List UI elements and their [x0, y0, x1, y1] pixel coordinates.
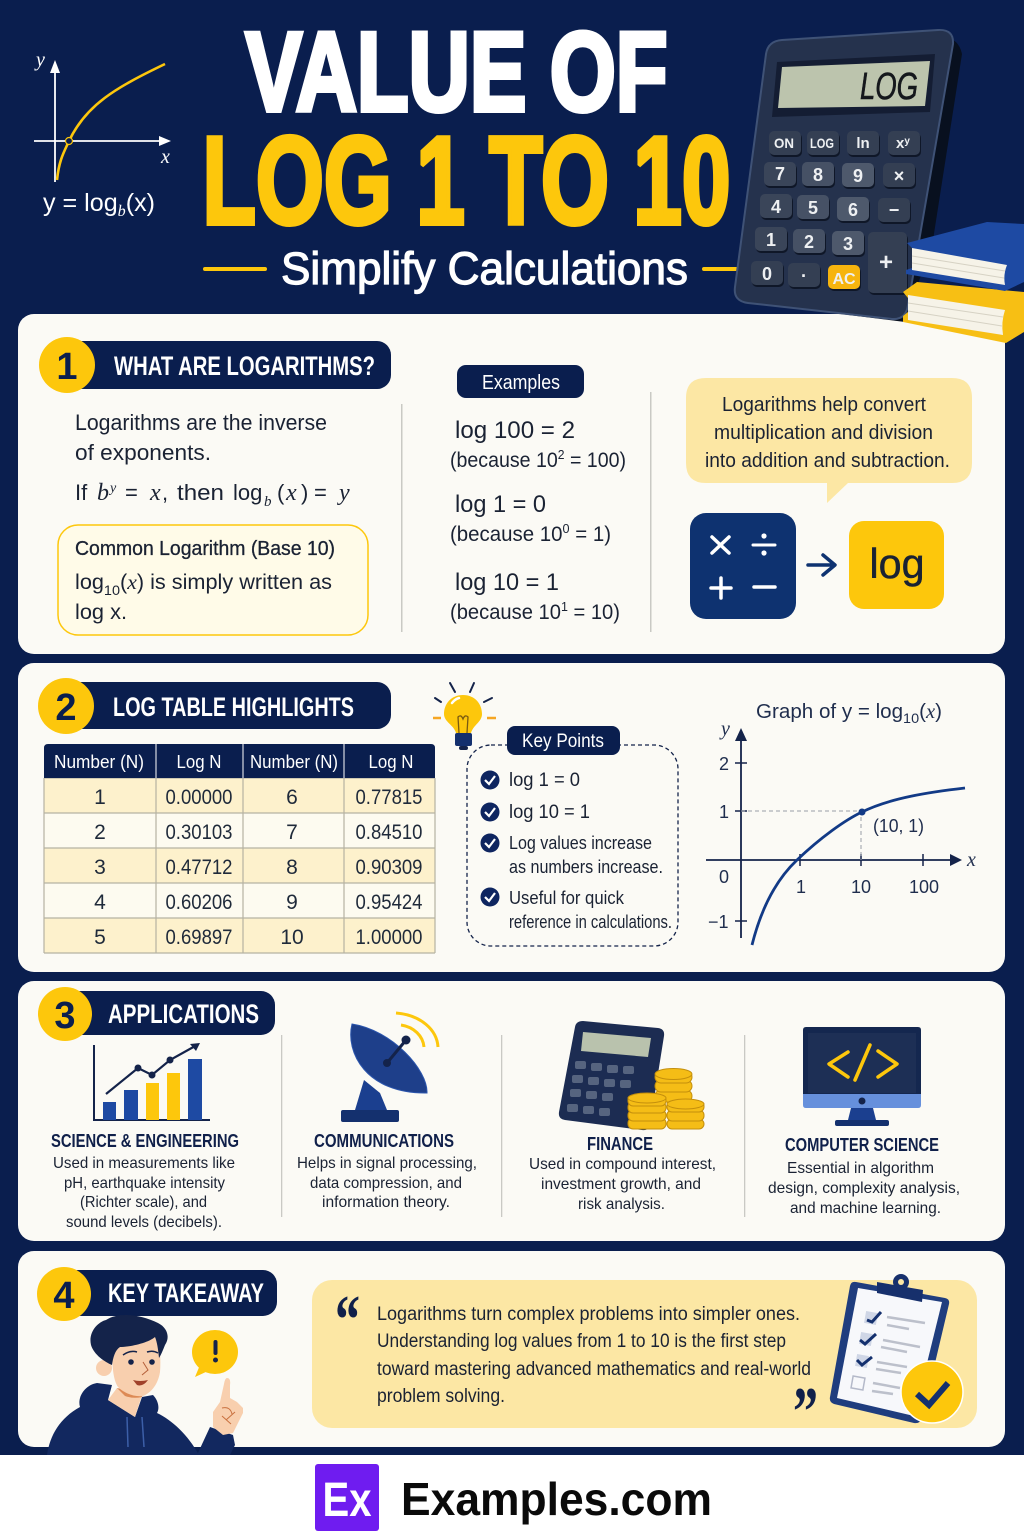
log table: 0.90309	[356, 856, 422, 879]
section 2 heading: 2	[55, 687, 77, 729]
icon: logarithm curve graph: b	[118, 203, 126, 220]
icon: bar chart	[94, 1043, 210, 1120]
calculator keys: LOG	[810, 135, 834, 151]
wordmark: Examples.com	[401, 1473, 712, 1525]
section 1 heading: WHAT ARE LOGARITHMS?	[114, 351, 375, 381]
calculator keys: 7	[775, 164, 785, 184]
section 4 heading: KEY TAKEAWAY	[108, 1278, 264, 1308]
log table: 7	[286, 821, 298, 844]
chart: graph of y = log10(x): 1	[719, 802, 729, 822]
calculator keys: 9	[853, 166, 863, 186]
icon: arithmetic operators	[690, 513, 796, 619]
calculator keys: +	[879, 249, 893, 276]
examples list: = 1)	[570, 523, 611, 546]
icon: logarithm curve graph: y	[34, 49, 45, 71]
calculator keys: 5	[808, 198, 818, 218]
chart: graph of y = log10(x)	[706, 701, 976, 945]
calculator keys: −	[889, 200, 899, 220]
calculator keys: y	[904, 136, 910, 147]
log table: 0.84510	[356, 821, 422, 844]
face	[112, 1335, 160, 1396]
text: definition: y	[108, 481, 117, 496]
log table: 9	[286, 891, 298, 914]
speech bubble: conversion note: into addition and subtraction.	[705, 450, 950, 472]
panel: key points	[467, 726, 678, 946]
application: communications: COMMUNICATIONS	[314, 1131, 454, 1151]
application: science and engineering: pH, earthquake intensity	[64, 1175, 225, 1192]
chart title: (	[919, 701, 926, 723]
log table: 0.95424	[356, 891, 423, 914]
calculator keys: ON	[774, 135, 794, 151]
eyes and mouth	[123, 1351, 158, 1385]
chart: graph of y = log10(x): y	[719, 718, 730, 740]
calculator keys: 3	[843, 234, 853, 254]
icon: computer monitor with code	[803, 1027, 921, 1126]
examples list: log 1 = 0	[455, 491, 546, 518]
coins	[628, 1068, 704, 1129]
yellow book	[903, 282, 1024, 343]
examples list: (because 10	[450, 601, 566, 624]
application: computer science: and machine learning.	[790, 1200, 941, 1217]
ear	[96, 1360, 112, 1376]
section 4 heading: 4	[53, 1275, 75, 1317]
examples list: log 10 = 1	[455, 569, 559, 596]
section 1 heading: 1	[56, 346, 78, 388]
text: definition: Logarithms are the inverse	[75, 410, 327, 435]
section 3 heading: APPLICATIONS	[108, 999, 259, 1029]
icon: stacked books	[903, 222, 1024, 343]
icon: calculator with coins	[559, 1021, 704, 1130]
takeaway text: Understanding log values from 1 to 10 is the first step	[377, 1331, 786, 1352]
table header: Number (N)	[54, 752, 144, 772]
application: computer science	[768, 1135, 960, 1217]
calculator keys: x	[896, 135, 904, 152]
application: communications: information theory.	[322, 1194, 450, 1211]
title: value of: VALUE OF	[246, 10, 668, 134]
examples list: (because 10	[450, 523, 566, 546]
text: definition: b	[264, 494, 272, 510]
icon: logarithm curve graph: (x)	[126, 189, 155, 217]
log badge	[849, 521, 944, 609]
finger creases	[222, 1408, 235, 1424]
text: definition: x	[149, 480, 161, 506]
chart: graph of y = log10(x): 2	[719, 754, 729, 774]
takeaway text: Logarithms turn complex problems into simpler ones.	[377, 1304, 800, 1325]
key point text: Log values increase	[509, 833, 652, 853]
calculator display: LOG	[860, 66, 918, 108]
log table: 0.00000	[166, 786, 232, 809]
chart title: Graph of y = log	[756, 701, 899, 723]
calculator keys: 1	[766, 230, 776, 250]
callout: common logarithm: x) is simply written as	[127, 570, 326, 594]
application: finance: Used in compound interest,	[529, 1156, 716, 1173]
speech bubble: conversion note: Logarithms help convert	[722, 394, 926, 416]
log table: 0.60206	[166, 891, 232, 914]
table header: Log N	[176, 752, 222, 772]
chart title: 10	[903, 710, 919, 726]
application: communications	[297, 1131, 477, 1211]
panel: applications	[18, 981, 1005, 1241]
table header: Log N	[368, 752, 414, 772]
sleeve cuff	[197, 1427, 235, 1455]
footer logo: Ex	[322, 1474, 372, 1527]
callout: common logarithm: Common Logarithm (Base 10)	[75, 538, 335, 560]
takeaway text: problem solving.	[377, 1386, 505, 1407]
chart: graph of y = log10(x): 100	[909, 877, 939, 897]
divider	[650, 392, 652, 632]
callout: common logarithm	[58, 525, 368, 635]
divider	[501, 1035, 502, 1217]
examples list: log 100 = 2	[455, 417, 575, 444]
application: science and engineering: SCIENCE & ENGINEERING	[51, 1131, 239, 1151]
icon: logarithm curve graph: x	[160, 146, 170, 168]
divider	[401, 404, 402, 632]
log table: 6	[286, 786, 298, 809]
log table: 4	[94, 891, 106, 914]
application: science and engineering: sound levels (decibels).	[66, 1214, 222, 1231]
panel: log table highlights	[18, 663, 1005, 972]
log table: 0.69897	[166, 926, 232, 949]
log table: 10	[280, 926, 304, 949]
text: definition	[75, 410, 350, 510]
text: definition: If	[75, 480, 88, 505]
speech bubble with exclamation	[192, 1330, 238, 1377]
application: communications: data compression, and	[310, 1175, 462, 1192]
text: definition: )	[301, 480, 308, 505]
takeaway text: toward mastering advanced mathematics and real-world	[377, 1359, 811, 1380]
panel: key points: Key Points	[522, 731, 604, 752]
text: definition: ,	[162, 480, 168, 505]
calculator keys: 2	[804, 232, 814, 252]
icon: clipboard checklist	[830, 1274, 963, 1423]
key point text: as numbers increase.	[509, 857, 663, 877]
application: computer science: design, complexity analysis,	[768, 1180, 960, 1197]
examples list: 2	[558, 447, 565, 462]
hoodie	[47, 1383, 199, 1455]
key point text: reference in calculations.	[509, 912, 672, 932]
calculator keys: ×	[894, 166, 904, 186]
table header: Number (N)	[250, 752, 338, 772]
hand pointing up	[213, 1378, 243, 1435]
opening quote mark: “	[335, 1282, 360, 1359]
chart: graph of y = log10(x): 1	[796, 877, 806, 897]
log table	[44, 744, 435, 953]
text: definition: x	[285, 480, 297, 506]
text: definition: log	[233, 480, 262, 505]
log table: 0.30103	[166, 821, 232, 844]
application: computer science: COMPUTER SCIENCE	[785, 1135, 939, 1155]
application: computer science: Essential in algorithm	[787, 1160, 934, 1177]
callout: common logarithm: log	[75, 571, 103, 594]
callout: common logarithm: 10	[104, 582, 120, 598]
section 3 heading	[38, 987, 275, 1041]
section 3 heading: 3	[54, 995, 76, 1037]
examples list: 1	[561, 599, 568, 614]
text: definition: of exponents.	[75, 440, 211, 465]
section 1 heading	[39, 337, 391, 393]
log badge: log	[870, 540, 924, 587]
chart: graph of y = log10(x): 0	[719, 867, 729, 887]
panel: key takeaway	[18, 1251, 1005, 1447]
examples list: = 10)	[568, 601, 620, 624]
examples badge: Examples	[482, 372, 560, 394]
chart: graph of y = log10(x): 10	[851, 877, 871, 897]
footer logo	[315, 1464, 712, 1531]
callout: common logarithm: log x.	[75, 601, 127, 624]
check badge	[901, 1361, 963, 1423]
drawstrings	[127, 1417, 144, 1447]
divider	[744, 1035, 745, 1217]
text: definition: (	[277, 480, 285, 505]
chart title: x)	[926, 701, 942, 723]
log table: 1	[94, 786, 106, 809]
text: definition: =	[314, 480, 327, 505]
log table: 5	[94, 926, 106, 949]
section 2 heading	[38, 678, 391, 734]
application: finance: investment growth, and	[541, 1176, 701, 1193]
subtitle with side rules: Simplify Calculations	[281, 243, 688, 294]
logo mark	[315, 1464, 379, 1531]
text: definition: then	[177, 480, 224, 505]
application: science and engineering	[51, 1131, 239, 1231]
chart: graph of y = log10(x): (10, 1)	[873, 816, 924, 836]
icon: logarithm curve graph	[34, 49, 171, 220]
icon: calculator	[735, 30, 962, 322]
calculator display	[772, 54, 935, 117]
application: finance: FINANCE	[587, 1134, 653, 1154]
log table: 0.47712	[166, 856, 232, 879]
application: finance	[529, 1134, 716, 1213]
log table: 3	[94, 856, 106, 879]
icon: logarithm curve graph: y = log	[43, 189, 117, 217]
key point text: Useful for quick	[509, 888, 625, 908]
closing quote mark: ”	[793, 1374, 818, 1451]
key point text: log 1 = 0	[509, 770, 580, 791]
footer background	[0, 1455, 1024, 1536]
application: communications: Helps in signal processing,	[297, 1155, 477, 1172]
key point text	[509, 770, 672, 932]
calculator keys	[751, 131, 920, 293]
panel: what are logarithms	[18, 314, 1005, 654]
table header	[44, 744, 435, 778]
icon: light bulb	[433, 683, 496, 750]
application: finance: risk analysis.	[578, 1196, 665, 1213]
speech bubble: conversion note	[686, 378, 972, 503]
calculator keys: 8	[813, 165, 823, 185]
section 2 heading: LOG TABLE HIGHLIGHTS	[113, 692, 354, 722]
calculator keys: 4	[771, 197, 781, 217]
speech bubble: conversion note: multiplication and division	[714, 422, 933, 444]
blue book	[906, 222, 1024, 291]
examples list	[450, 417, 626, 624]
application: science and engineering: Used in measurements like	[53, 1155, 235, 1172]
examples badge	[457, 365, 584, 398]
divider	[281, 1035, 282, 1217]
hair	[90, 1315, 168, 1365]
log table: 1.00000	[356, 926, 422, 949]
chart: graph of y = log10(x): x	[966, 849, 976, 871]
neck	[108, 1388, 142, 1417]
text: definition: y	[337, 480, 350, 506]
callout: key takeaway	[312, 1280, 977, 1451]
callout: common logarithm: (	[120, 571, 127, 594]
section 4 heading	[37, 1267, 277, 1321]
examples list: 0	[562, 521, 570, 536]
title: log 1 to 10: LOG 1 TO 10	[202, 112, 730, 250]
log table: 8	[286, 856, 298, 879]
examples list: = 100)	[565, 449, 626, 472]
takeaway text	[377, 1304, 811, 1407]
text: definition: =	[125, 480, 138, 505]
illustration: student pointing	[47, 1315, 243, 1455]
check icons	[480, 770, 500, 906]
arrow	[808, 555, 835, 575]
text: definition: b	[97, 480, 109, 506]
examples list: (because 10	[450, 449, 566, 472]
calculator keys: 0	[762, 264, 772, 284]
application: science and engineering: (Richter scale), and	[80, 1194, 207, 1211]
log table: 2	[94, 821, 106, 844]
calculator keys: ·	[801, 266, 807, 286]
icon: satellite dish	[341, 1013, 438, 1122]
key point text: log 10 = 1	[509, 802, 590, 823]
calculator keys: AC	[832, 271, 856, 288]
log table: 0.77815	[356, 786, 422, 809]
chart: graph of y = log10(x): −1	[708, 912, 729, 932]
calculator keys: 6	[848, 200, 858, 220]
calculator keys: ln	[856, 135, 870, 152]
